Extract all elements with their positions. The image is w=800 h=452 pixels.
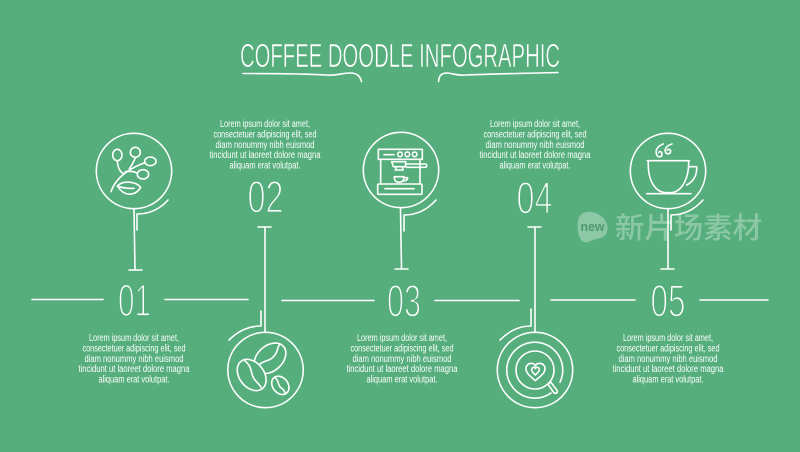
connector: step 02 [229, 227, 271, 340]
text block: step 05: tincidunt ut laoreet dolore magna [612, 364, 724, 375]
text block: step 02: Lorem ipsum dolor sit amet, [220, 119, 310, 130]
text block: step 05: aliquam erat volutpat. [632, 374, 704, 386]
connector: step 03 [395, 200, 436, 269]
text block: step 05: Lorem ipsum dolor sit amet, [623, 333, 713, 344]
text block: step 01 [78, 333, 190, 386]
step 04 number: 04 [516, 172, 552, 224]
text block: step 04: consectetuer adipiscing elit, sed [484, 130, 586, 140]
text block: step 02: consectetuer adipiscing elit, sed [214, 130, 316, 140]
watermark: 新片场素材 [615, 212, 762, 245]
text block: step 02 [210, 119, 321, 172]
icon: coffee beans [228, 332, 303, 408]
text block: step 04: Lorem ipsum dolor sit amet, [490, 119, 580, 130]
text block: step 05 [612, 333, 724, 386]
connector: step 01 [129, 200, 168, 270]
text block: step 03: tincidunt ut laoreet dolore magna [346, 364, 458, 375]
timeline line [32, 300, 768, 301]
title: COFFEE DOODLE INFOGRAPHIC [240, 37, 560, 74]
text block: step 01: aliquam erat volutpat. [98, 374, 170, 386]
icon: espresso machine [363, 132, 439, 208]
text block: step 02: diam nonummy nibh euismod [216, 140, 314, 151]
watermark: new [580, 220, 605, 234]
text block: step 04: diam nonummy nibh euismod [486, 140, 584, 151]
text block: step 01: diam nonummy nibh euismod [84, 354, 184, 365]
title [240, 37, 560, 82]
text block: step 03 [346, 333, 458, 386]
text block: step 04: aliquam erat volutpat. [500, 160, 570, 172]
text block: step 01: consectetuer adipiscing elit, sed [82, 344, 186, 354]
text block: step 03: Lorem ipsum dolor sit amet, [357, 333, 447, 344]
step 05 number: 05 [650, 276, 686, 326]
text block: step 01: tincidunt ut laoreet dolore magna [78, 364, 190, 375]
text block: step 04: tincidunt ut laoreet dolore magna [480, 150, 591, 161]
icon: coffee cup top view with heart [497, 332, 573, 408]
step 03 number: 03 [387, 276, 421, 326]
icon: steaming coffee cup [630, 133, 706, 209]
text block: step 02: aliquam erat volutpat. [230, 160, 300, 172]
connector: step 04 [500, 227, 541, 340]
step 02 number: 02 [248, 172, 284, 222]
text block: step 02: tincidunt ut laoreet dolore magna [210, 150, 321, 161]
text block: step 05: diam nonummy nibh euismod [618, 354, 718, 365]
text block: step 05: consectetuer adipiscing elit, sed [616, 344, 720, 354]
connector: step 05 [661, 200, 703, 269]
icon: coffee plant with berries [96, 133, 172, 209]
step 01 number: 01 [118, 275, 151, 326]
text block: step 03: consectetuer adipiscing elit, sed [350, 344, 454, 354]
text block: step 01: Lorem ipsum dolor sit amet, [89, 333, 179, 344]
text block: step 04 [480, 119, 591, 172]
text block: step 03: aliquam erat volutpat. [366, 374, 438, 386]
text block: step 03: diam nonummy nibh euismod [352, 354, 452, 365]
